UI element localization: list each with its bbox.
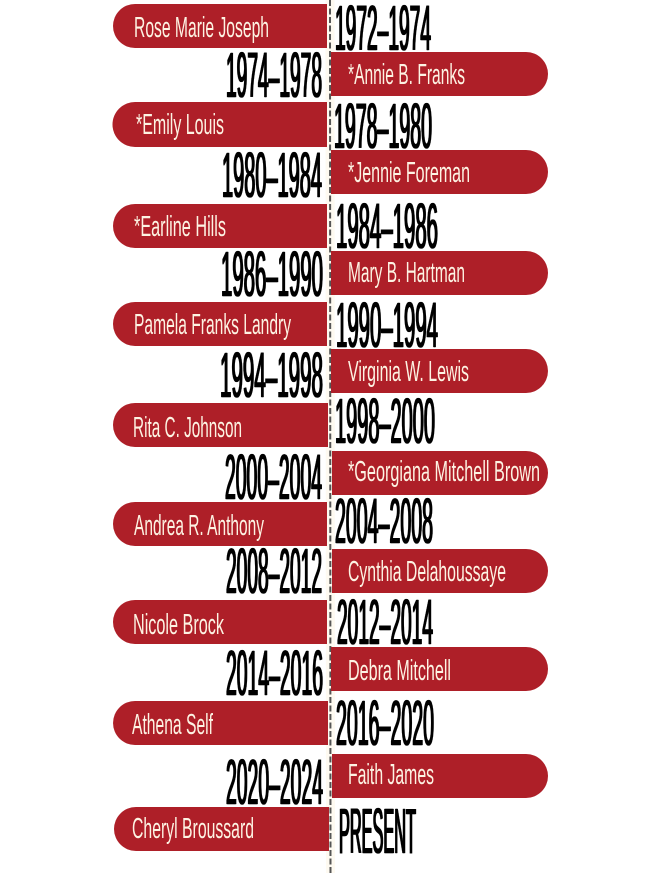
entry: Virginia W. Lewis xyxy=(331,349,548,393)
entry: Cynthia Delahoussaye xyxy=(332,549,548,593)
timeline chart: 2012–2014 xyxy=(337,586,433,658)
entry: Emily Louis xyxy=(112,102,327,147)
entry: Faith James: Faith James xyxy=(348,759,434,791)
entry: Emily Louis: *Emily Louis xyxy=(136,109,224,141)
timeline chart: 2014–2016 xyxy=(226,637,323,709)
entry: Andrea R. Anthony: Andrea R. Anthony xyxy=(134,510,264,542)
timeline chart: 1978–1980 xyxy=(334,90,432,162)
entry: Cynthia Delahoussaye: Cynthia Delahoussaye xyxy=(348,556,506,588)
entry: Mary B. Hartman: Mary B. Hartman xyxy=(348,257,465,289)
entry: Faith James xyxy=(332,754,548,798)
entry: Jennie Foreman xyxy=(331,150,548,194)
timeline chart: 2004–2008 xyxy=(335,485,433,557)
entry: Rita C. Johnson xyxy=(113,403,328,447)
timeline chart: 1974–1978 xyxy=(226,39,322,111)
entry: Debra Mitchell xyxy=(331,647,548,691)
timeline chart: 1980–1984 xyxy=(222,139,322,211)
entry: Mary B. Hartman xyxy=(331,251,548,295)
entry: Cheryl Broussard xyxy=(114,807,329,851)
timeline chart: 2016–2020 xyxy=(336,687,434,759)
entry: Athena Self xyxy=(113,701,328,745)
timeline chart: PRESENT xyxy=(339,795,416,867)
timeline chart: 1986–1990 xyxy=(221,238,323,310)
entry: Andrea R. Anthony xyxy=(113,502,327,546)
entry: Earline Hills: *Earline Hills xyxy=(134,211,226,243)
timeline chart: 2008–2012 xyxy=(226,535,322,607)
entry: Rose Marie Joseph: Rose Marie Joseph xyxy=(134,12,269,44)
timeline axis glow xyxy=(326,0,335,873)
entry: Debra Mitchell: Debra Mitchell xyxy=(348,655,451,687)
timeline chart: 2020–2024 xyxy=(226,746,323,818)
entry: Virginia W. Lewis: Virginia W. Lewis xyxy=(348,356,469,388)
timeline axis dashed line xyxy=(329,0,332,873)
entry: Earline Hills xyxy=(113,204,327,248)
entry: Rose Marie Joseph xyxy=(113,4,327,48)
entry: Cheryl Broussard: Cheryl Broussard xyxy=(132,813,254,845)
entry: Georgiana Mitchell Brown xyxy=(332,451,548,495)
entry: Athena Self: Athena Self xyxy=(132,709,214,741)
entry: Annie B. Franks xyxy=(331,52,548,96)
timeline chart: 1998–2000 xyxy=(335,385,435,457)
entry: Rita C. Johnson: Rita C. Johnson xyxy=(133,412,242,444)
timeline chart: 1994–1998 xyxy=(220,339,323,411)
timeline chart: 1990–1994 xyxy=(336,289,438,361)
timeline chart: 1984–1986 xyxy=(336,190,438,262)
entry: Pamela Franks Landry: Pamela Franks Landry xyxy=(134,309,291,341)
entry: Jennie Foreman: *Jennie Foreman xyxy=(348,157,470,189)
entry: Pamela Franks Landry xyxy=(113,302,327,346)
entry: Annie B. Franks: *Annie B. Franks xyxy=(348,59,465,91)
timeline chart: 2000–2004 xyxy=(225,441,322,513)
entry: Nicole Brock: Nicole Brock xyxy=(133,609,224,641)
entry: Nicole Brock xyxy=(113,600,327,644)
